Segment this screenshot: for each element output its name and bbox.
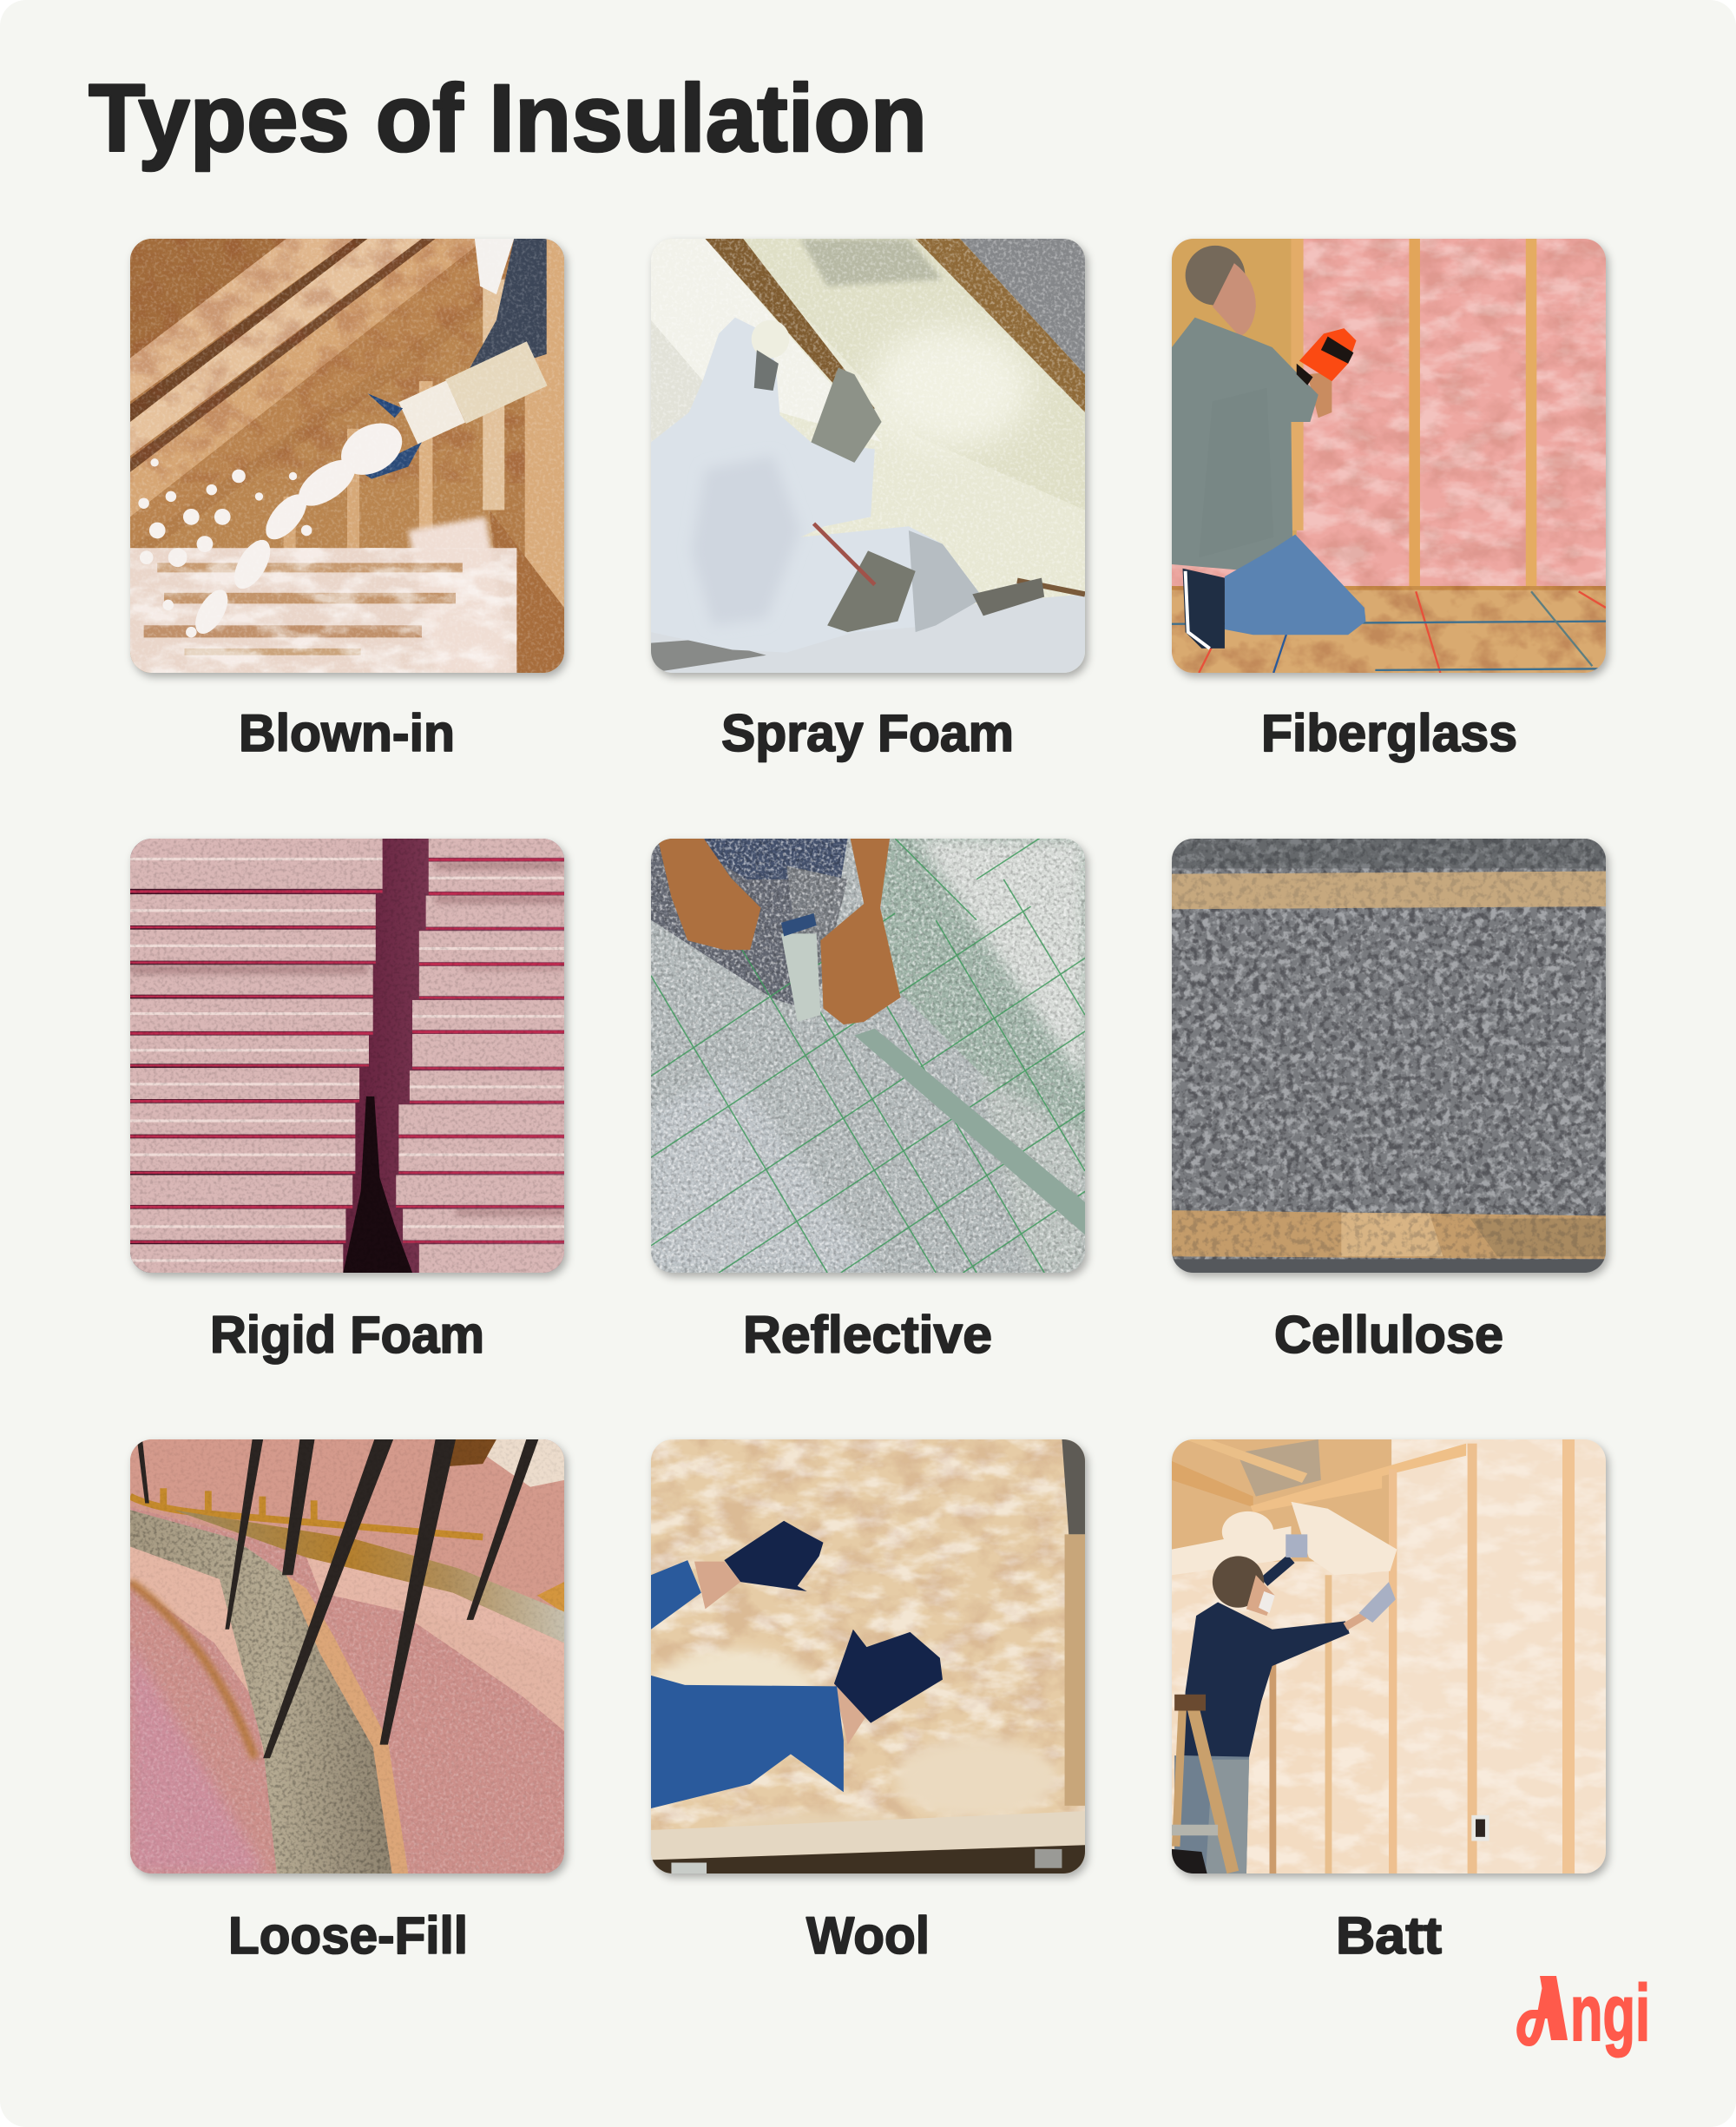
tape strip (854, 1029, 1085, 1235)
label: Reflective (743, 1306, 992, 1364)
green grid lines (651, 744, 1085, 1273)
logo: Angi (1521, 1969, 1650, 2058)
orange glove (1299, 328, 1356, 381)
insulation roll (1172, 1502, 1397, 1575)
logo letters: ngi (1570, 1969, 1650, 2058)
lower arm and glove (651, 1630, 943, 1808)
worker in white suit (651, 318, 1044, 653)
hands (658, 839, 901, 1024)
label: Rigid Foam (210, 1306, 484, 1364)
label: Fiberglass (1261, 704, 1517, 762)
photo: stacked pink foam boards (130, 839, 564, 1273)
hose (361, 364, 537, 479)
blown fluff (138, 412, 411, 639)
worker (1172, 246, 1365, 649)
photo: worker spraying foam (651, 239, 1085, 673)
logo swoosh and A (1521, 1976, 1568, 2042)
main duct (130, 1439, 564, 1873)
label: Wool (806, 1906, 930, 1965)
label: Batt (1336, 1906, 1442, 1965)
ladder (1172, 1702, 1233, 1872)
panel: fiberglass (1172, 239, 1606, 762)
panel: loose-fill (130, 1439, 564, 1965)
label: Spray Foam (721, 704, 1014, 762)
upper arm and glove (651, 1521, 823, 1630)
photo: grey cellulose between joists (1172, 839, 1606, 1273)
photo: hands taping reflective foil (651, 744, 1085, 1273)
photo: worker installing pink fiberglass (1172, 239, 1606, 673)
photo: worker on ladder installing batts (1172, 1439, 1606, 1873)
worker (1174, 1534, 1396, 1873)
label: Cellulose (1274, 1306, 1503, 1364)
panel: reflective (651, 744, 1085, 1364)
panel: cellulose (1172, 839, 1606, 1364)
label: Blown-in (239, 704, 455, 762)
label: Loose-Fill (228, 1906, 468, 1965)
black straps (137, 1439, 538, 1758)
panel: blown-in (130, 239, 564, 762)
branch duct (174, 1510, 564, 1731)
panel: spray foam (651, 239, 1085, 762)
panel: rigid foam (130, 839, 564, 1364)
photo: gloved hands pressing wool (651, 1439, 1085, 1873)
photo: pink loose-fill around ducts (130, 1439, 564, 1873)
photo: blown-in attic insulation (130, 239, 564, 673)
panel: wool (651, 1439, 1085, 1965)
title: Types of Insulation (89, 65, 927, 172)
wall outlet (1471, 1815, 1489, 1841)
panel: batt (1172, 1439, 1606, 1965)
